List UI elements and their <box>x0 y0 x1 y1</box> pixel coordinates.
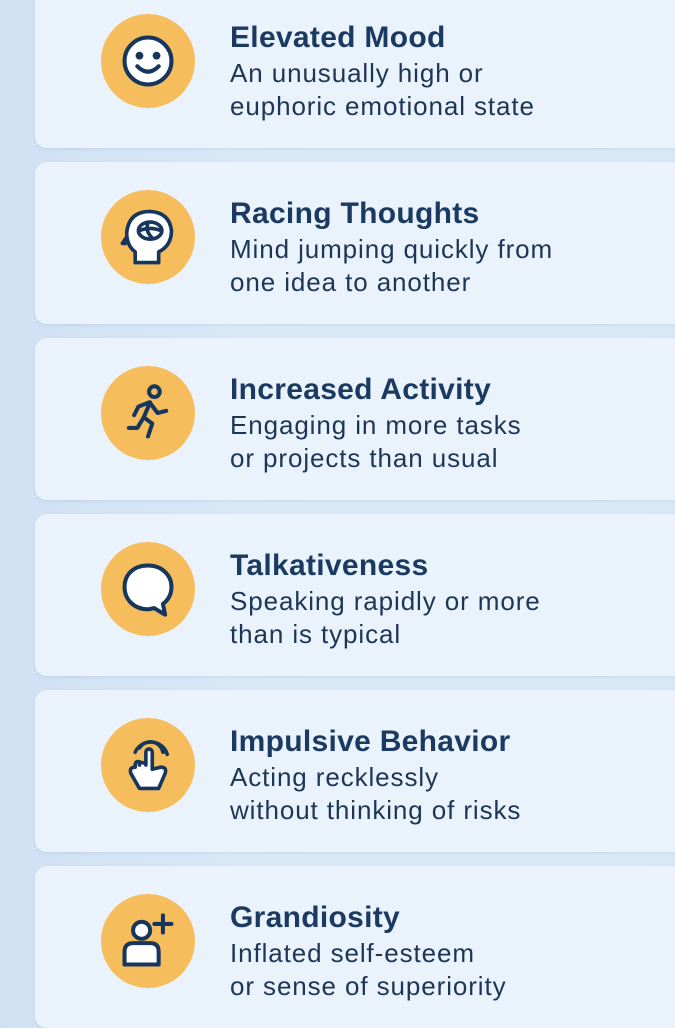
text: grandiosity <box>230 901 506 1001</box>
icon: person with star <box>101 894 195 988</box>
text: impulsive behavior: Impulsive Behavior <box>230 725 510 758</box>
text: increased activity <box>230 373 522 473</box>
icon: head with brain <box>101 190 195 284</box>
text: elevated mood: An unusually high or <box>230 58 484 88</box>
text: impulsive behavior: Acting recklessly <box>230 762 439 792</box>
text: talkativeness: Talkativeness <box>230 549 428 582</box>
text: racing thoughts <box>230 197 553 297</box>
card: grandiosity <box>35 866 675 1028</box>
text: elevated mood: Elevated Mood <box>230 21 446 54</box>
text: grandiosity: Inflated self-esteem <box>230 938 475 968</box>
text: impulsive behavior <box>230 725 521 825</box>
card: impulsive behavior <box>35 690 675 852</box>
card: increased activity <box>35 338 675 500</box>
card: elevated mood <box>35 0 675 148</box>
icon: tapping hand <box>101 718 195 812</box>
text: increased activity: Increased Activity <box>230 373 491 406</box>
text: talkativeness: than is typical <box>230 619 401 649</box>
text: racing thoughts: Mind jumping quickly from <box>230 234 553 264</box>
text: talkativeness: Speaking rapidly or more <box>230 586 541 616</box>
text: racing thoughts: Racing Thoughts <box>230 197 479 230</box>
text: grandiosity: or sense of superiority <box>230 971 506 1001</box>
icon: speech bubble <box>101 542 195 636</box>
text: grandiosity: Grandiosity <box>230 901 400 934</box>
text: impulsive behavior: without thinking of risks <box>230 795 521 825</box>
text: talkativeness <box>230 549 541 649</box>
text: elevated mood: euphoric emotional state <box>230 91 535 121</box>
icon: smiley <box>101 14 195 108</box>
card: racing thoughts <box>35 162 675 324</box>
icon: runner <box>101 366 195 460</box>
text: racing thoughts: one idea to another <box>230 267 471 297</box>
text: increased activity: Engaging in more tasks <box>230 410 522 440</box>
text: increased activity: or projects than usual <box>230 443 498 473</box>
text: elevated mood <box>230 21 535 121</box>
card: talkativeness <box>35 514 675 676</box>
